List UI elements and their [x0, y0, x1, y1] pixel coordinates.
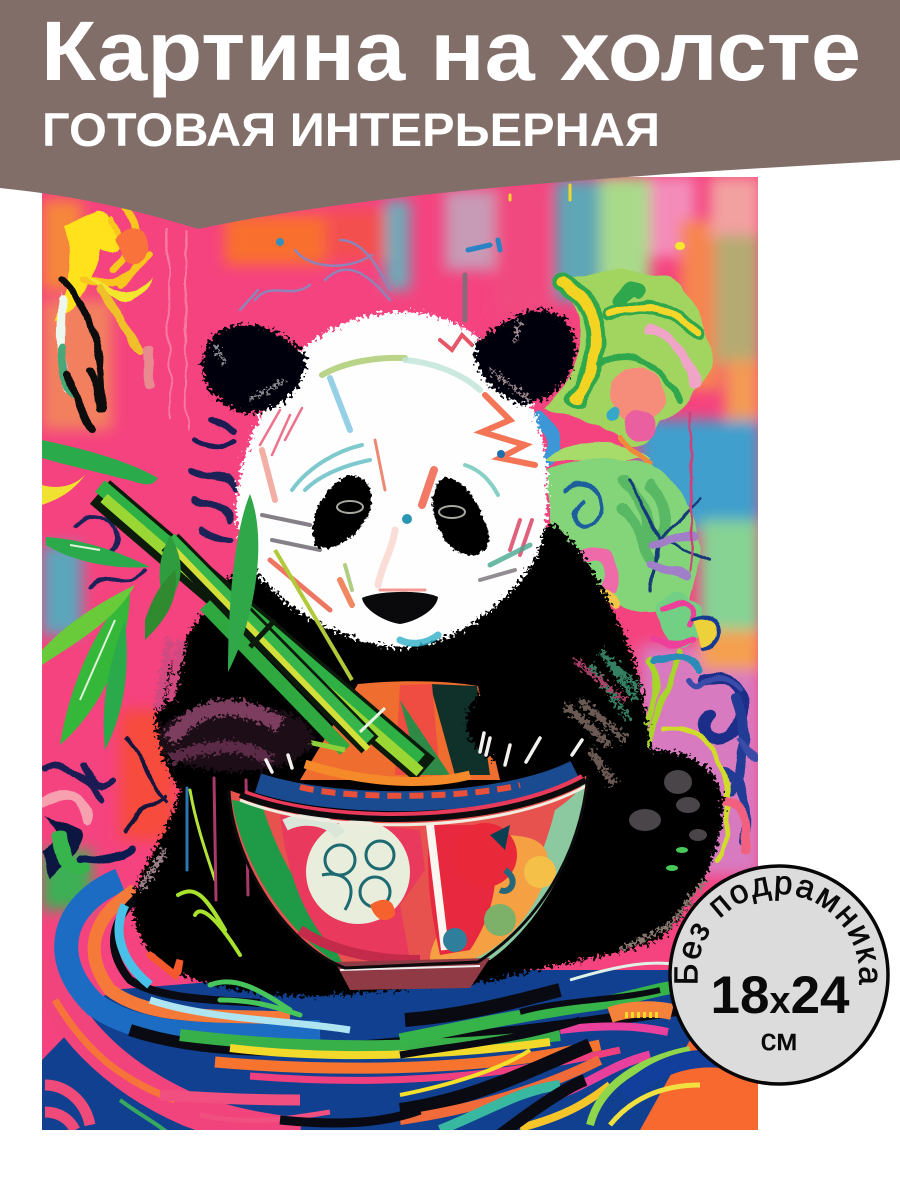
- subtitle: ГОТОВАЯ ИНТЕРЬЕРНАЯ: [42, 103, 660, 156]
- size badge: [668, 864, 890, 1086]
- badge curved label: Без подрамника: [674, 876, 878, 985]
- panda foot pads: [629, 770, 707, 871]
- painting background: [42, 177, 760, 1135]
- bowl body: [229, 775, 588, 968]
- leaf highlights: [70, 545, 115, 700]
- badge unit: см: [761, 1022, 797, 1057]
- panda claws: [266, 733, 582, 772]
- ornament: left navy scrolls and bands: [45, 420, 235, 880]
- title: Картина на холсте: [41, 4, 861, 98]
- head fur: [237, 312, 548, 648]
- panda head: [237, 312, 548, 648]
- painting: panda with bowl: [42, 177, 760, 1135]
- bamboo leaves: [42, 440, 258, 750]
- panda nose: [362, 592, 438, 624]
- panda body: [133, 525, 723, 996]
- bowl interior: [300, 681, 500, 780]
- eye patches: [312, 475, 489, 555]
- bowl foot: [335, 958, 490, 990]
- badge circle: [670, 866, 888, 1084]
- face paint strokes: [260, 335, 535, 643]
- bamboo stalks and leaves: [42, 440, 425, 772]
- badge size: 18x24: [710, 966, 850, 1025]
- eyes: [337, 501, 465, 518]
- swirling water waves: [42, 880, 758, 1135]
- panda paws: [157, 676, 625, 785]
- panda ears: [202, 310, 575, 413]
- bowl: [229, 764, 588, 990]
- left paw: [157, 704, 313, 772]
- ornament: top-left yellow flower and feather: [55, 210, 187, 430]
- bowl decoration: [232, 780, 585, 968]
- ornament: lower right paisley: [645, 650, 756, 860]
- header banner: [0, 0, 900, 229]
- ornament: sketch lines at the top: [240, 185, 685, 320]
- bowl rim: [240, 764, 586, 825]
- right paw: [466, 676, 625, 785]
- panda leg drips: [150, 778, 300, 1015]
- ornament: right green and yellow scrolls: [540, 271, 711, 465]
- ornament: right teal and pink foliage: [547, 411, 719, 650]
